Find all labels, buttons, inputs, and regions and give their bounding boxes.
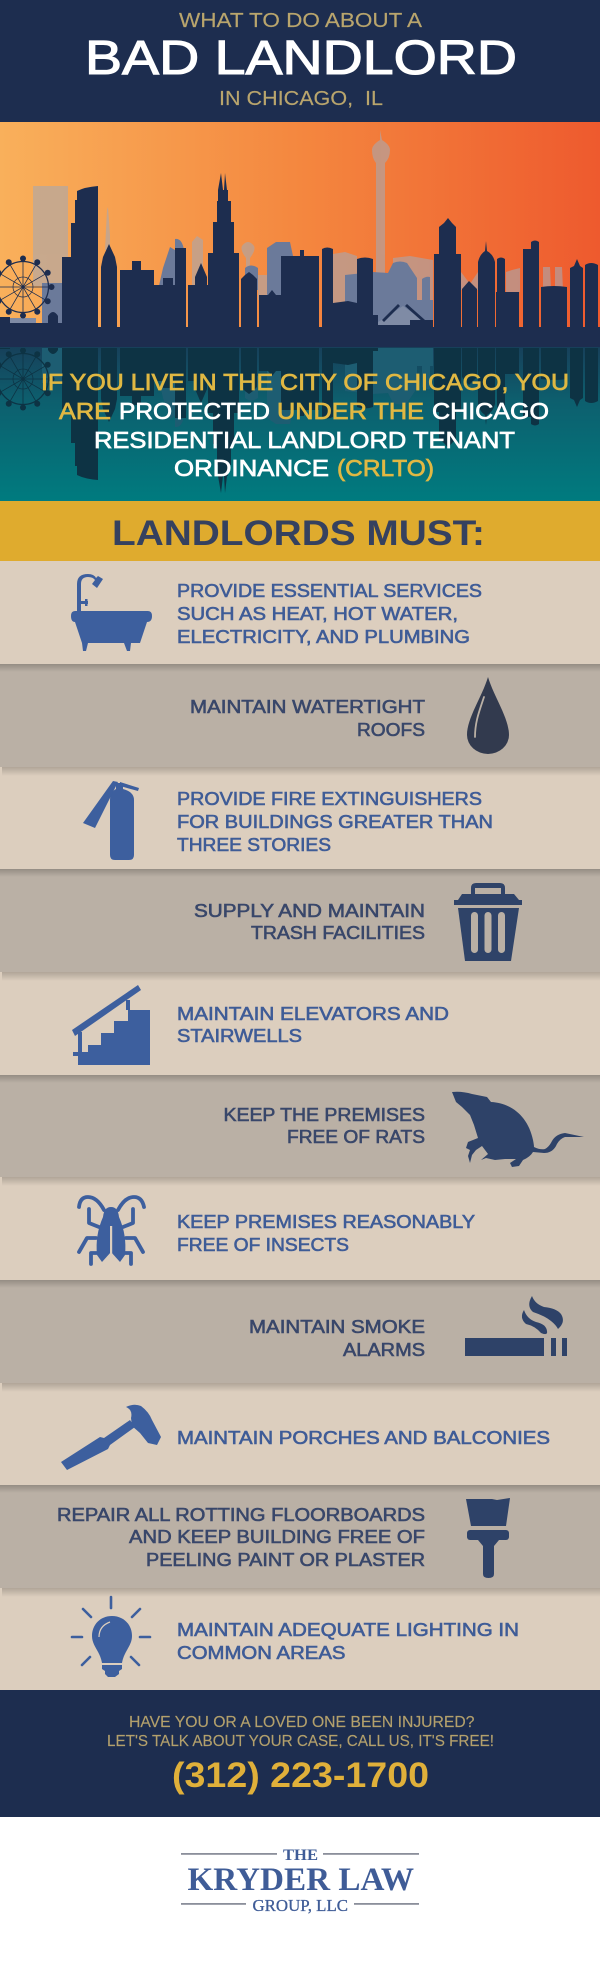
ordinance text: ARE	[59, 398, 111, 424]
text: watertight roofs	[190, 697, 425, 740]
panel: porches and balconies	[0, 1383, 600, 1485]
panel: essential services	[0, 561, 600, 664]
panel: trash facilities	[0, 869, 600, 972]
panel: watertight roofs	[0, 664, 600, 767]
ordinance text: CHICAGO	[432, 398, 549, 424]
text: porches and balconies: MAINTAIN PORCHES AND BALCONIES	[177, 1428, 550, 1448]
text: insects: KEEP PREMISES REASONABLY	[177, 1212, 475, 1232]
ordinance text: (CRLTO)	[337, 455, 434, 481]
panel: smoke alarms	[0, 1280, 600, 1383]
heading: landlords must: LANDLORDS MUST:	[112, 514, 485, 553]
footer prompt	[107, 1714, 494, 1750]
icon: hammer	[61, 1405, 161, 1470]
text: fire extinguishers	[177, 789, 493, 855]
ordinance text: PROTECTED	[119, 398, 270, 424]
text: rats: KEEP THE PREMISES	[224, 1105, 425, 1125]
text: watertight roofs: MAINTAIN WATERTIGHT	[190, 697, 425, 717]
title location: IN CHICAGO, IL	[219, 88, 383, 110]
text: trash facilities: TRASH FACILITIES	[251, 923, 425, 943]
text: elevators and stairwells: STAIRWELLS	[177, 1026, 302, 1046]
phone number: (312) 223-1700	[172, 1756, 429, 1795]
bridge	[378, 304, 425, 327]
text: trash facilities	[194, 901, 425, 943]
text: fire extinguishers: FOR BUILDINGS GREATER THAN	[177, 812, 493, 832]
ordinance text: IF YOU LIVE IN THE CITY OF CHICAGO, YOU	[41, 369, 569, 395]
text: insects	[177, 1212, 475, 1255]
logo: the kryder law group: THE	[283, 1847, 318, 1864]
header band	[0, 0, 600, 122]
panel: lighting	[0, 1588, 600, 1690]
ordinance text	[41, 369, 569, 481]
footer prompt: HAVE YOU OR A LOVED ONE BEEN INJURED?	[129, 1714, 475, 1731]
text: smoke alarms	[249, 1317, 425, 1360]
ordinance text: RESIDENTIAL LANDLORD TENANT	[94, 427, 515, 453]
icon: staircase	[72, 985, 150, 1065]
text: essential services: ELECTRICITY, AND PLUMBING	[177, 627, 470, 647]
panel: fire extinguishers	[0, 767, 600, 869]
text: elevators and stairwells: MAINTAIN ELEVATORS AND	[177, 1004, 449, 1024]
panel: floorboards and paint	[0, 1485, 600, 1588]
panel: rats	[0, 1075, 600, 1177]
text: lighting: COMMON AREAS	[177, 1643, 346, 1663]
text: essential services: PROVIDE ESSENTIAL SERVICES	[177, 581, 482, 601]
panel: elevators and stairwells	[0, 972, 600, 1075]
logo: the kryder law group: KRYDER LAW	[188, 1862, 414, 1898]
ordinance text: UNDER THE	[277, 398, 424, 424]
heading: landlords must	[0, 501, 600, 561]
icon: light bulb	[72, 1597, 150, 1677]
chicago skyline illustration	[0, 122, 600, 347]
skyline reflection	[0, 336, 598, 493]
panel: insects	[0, 1177, 600, 1280]
text: lighting: MAINTAIN ADEQUATE LIGHTING IN	[177, 1620, 519, 1640]
text: essential services: SUCH AS HEAT, HOT WATER,	[177, 604, 458, 624]
text: trash facilities: SUPPLY AND MAINTAIN	[194, 901, 425, 921]
main title: BAD LANDLORD	[85, 31, 517, 85]
icon: water drop	[467, 677, 509, 754]
icon: bathtub	[71, 574, 152, 651]
icon: cigarette with smoke	[465, 1296, 567, 1356]
text: fire extinguishers: THREE STORIES	[177, 835, 331, 855]
text: watertight roofs: ROOFS	[357, 720, 425, 740]
panel: city of chicago ordinance	[0, 336, 600, 501]
text: essential services	[177, 581, 482, 647]
icon: rat	[452, 1092, 584, 1167]
text: lighting	[177, 1620, 519, 1663]
text: rats: FREE OF RATS	[287, 1127, 425, 1147]
text: smoke alarms: ALARMS	[343, 1340, 425, 1360]
text: smoke alarms: MAINTAIN SMOKE	[249, 1317, 425, 1337]
icon: insect	[79, 1197, 144, 1264]
text: floorboards and paint: AND KEEP BUILDING FREE OF	[129, 1527, 425, 1547]
logo: the kryder law group	[181, 1847, 419, 1915]
footer prompt: LET'S TALK ABOUT YOUR CASE, CALL US, IT'S FREE!	[107, 1733, 494, 1750]
icon: trash can	[454, 883, 522, 961]
text: fire extinguishers: PROVIDE FIRE EXTINGUISHERS	[177, 789, 482, 809]
ordinance text: ORDINANCE	[174, 455, 329, 481]
icon: paint brush	[466, 1498, 510, 1578]
text: insects: FREE OF INSECTS	[177, 1235, 349, 1255]
text: floorboards and paint	[57, 1505, 425, 1570]
text: elevators and stairwells	[177, 1004, 449, 1046]
text: floorboards and paint: REPAIR ALL ROTTING FLOORBOARDS	[57, 1505, 425, 1525]
title kicker: WHAT TO DO ABOUT A	[179, 10, 423, 32]
logo: the kryder law group: GROUP, LLC	[252, 1896, 348, 1915]
text: rats	[224, 1105, 425, 1147]
footer call to action	[0, 1690, 600, 1817]
text: floorboards and paint: PEELING PAINT OR PLASTER	[146, 1550, 425, 1570]
icon: fire extinguisher	[83, 781, 139, 860]
